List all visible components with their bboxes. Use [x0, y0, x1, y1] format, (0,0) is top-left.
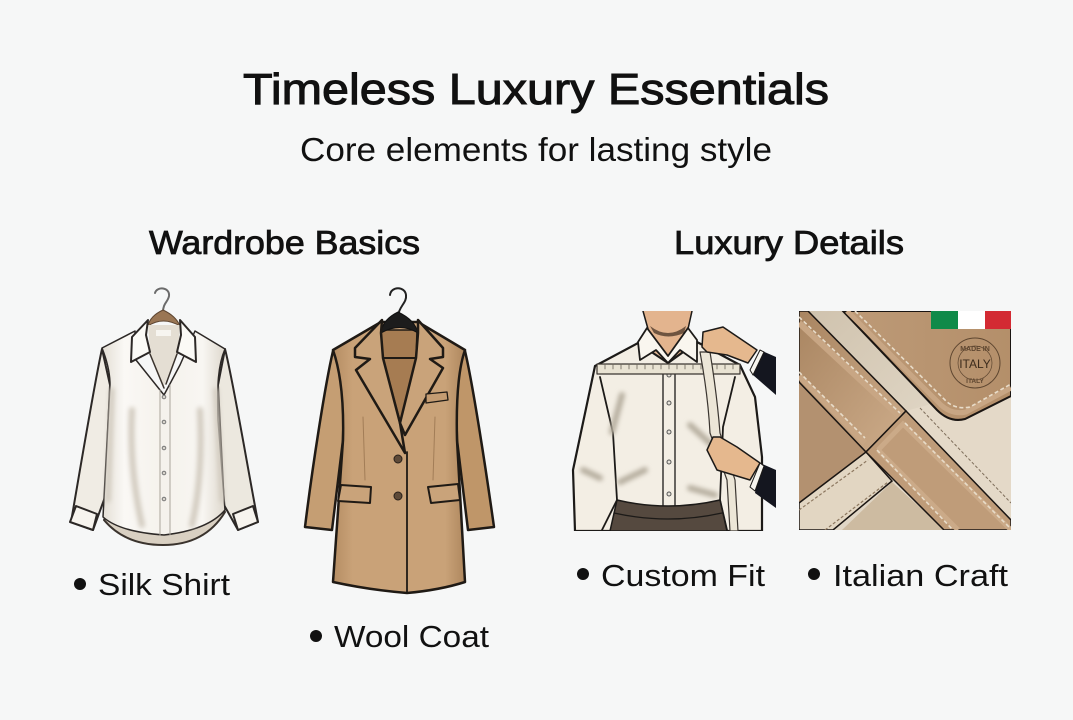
right cream area	[986, 467, 1011, 518]
coat flap pockets	[338, 485, 371, 503]
icon: italian leather craft	[799, 311, 1011, 530]
shirt collar	[131, 320, 150, 362]
horizontal tape	[597, 364, 740, 374]
lower hand	[707, 437, 760, 480]
icon: custom fit measuring	[573, 311, 776, 531]
coat left lapel	[355, 320, 405, 453]
cream straps	[799, 452, 892, 530]
top right leather patch	[843, 311, 1011, 420]
shirt torso	[573, 342, 762, 531]
upper diagonal strap	[799, 311, 906, 452]
heading: wardrobe basics: Wardrobe Basics	[149, 224, 420, 261]
stamp: made in italy: MADE IN	[960, 346, 990, 353]
lower cuff and sleeve	[755, 463, 776, 508]
collar	[638, 328, 697, 363]
label: wool coat: Wool Coat	[334, 619, 489, 654]
label: italian craft: Italian Craft	[833, 558, 1008, 593]
neck opening	[148, 325, 180, 388]
vertical tape	[700, 352, 738, 531]
infographic canvas	[69, 72, 1011, 648]
coat lining	[381, 330, 417, 425]
shirt hem underlay	[104, 500, 225, 545]
label: custom fit: Custom Fit	[601, 558, 765, 593]
panel: wardrobe basics	[70, 224, 494, 654]
coat body	[333, 322, 465, 593]
bottom leather panel	[799, 383, 866, 503]
left sleeve	[305, 351, 345, 530]
trousers	[610, 500, 727, 531]
coat right lapel	[400, 320, 443, 435]
stamp: made in italy: ITALY	[966, 378, 985, 385]
stamp: made in italy	[950, 338, 1000, 388]
placket and buttons	[663, 370, 675, 507]
left sleeve	[71, 349, 110, 530]
seam	[920, 408, 1011, 503]
lower diagonal strap	[866, 411, 1011, 530]
neck and chin	[644, 311, 692, 358]
shirt body	[102, 331, 225, 535]
right sleeve	[455, 351, 494, 530]
icon: silk shirt on hanger	[70, 288, 258, 545]
upper hand	[702, 327, 757, 363]
shirt buttons	[162, 395, 166, 501]
stamp: made in italy: ITALY	[959, 357, 991, 371]
icon: wool coat on hanger	[305, 288, 494, 593]
upper cuff and sleeve	[753, 350, 776, 395]
heading: luxury details: Luxury Details	[674, 224, 904, 261]
label: silk shirt: Silk Shirt	[98, 567, 230, 602]
italian flag	[931, 311, 1011, 329]
subtitle: Core elements for lasting style	[300, 131, 772, 168]
title: Timeless Luxury Essentials	[243, 65, 829, 114]
panel: luxury details	[573, 224, 1011, 593]
right sleeve	[218, 349, 258, 530]
coat breast pocket	[426, 392, 448, 403]
coat buttons	[394, 455, 402, 463]
